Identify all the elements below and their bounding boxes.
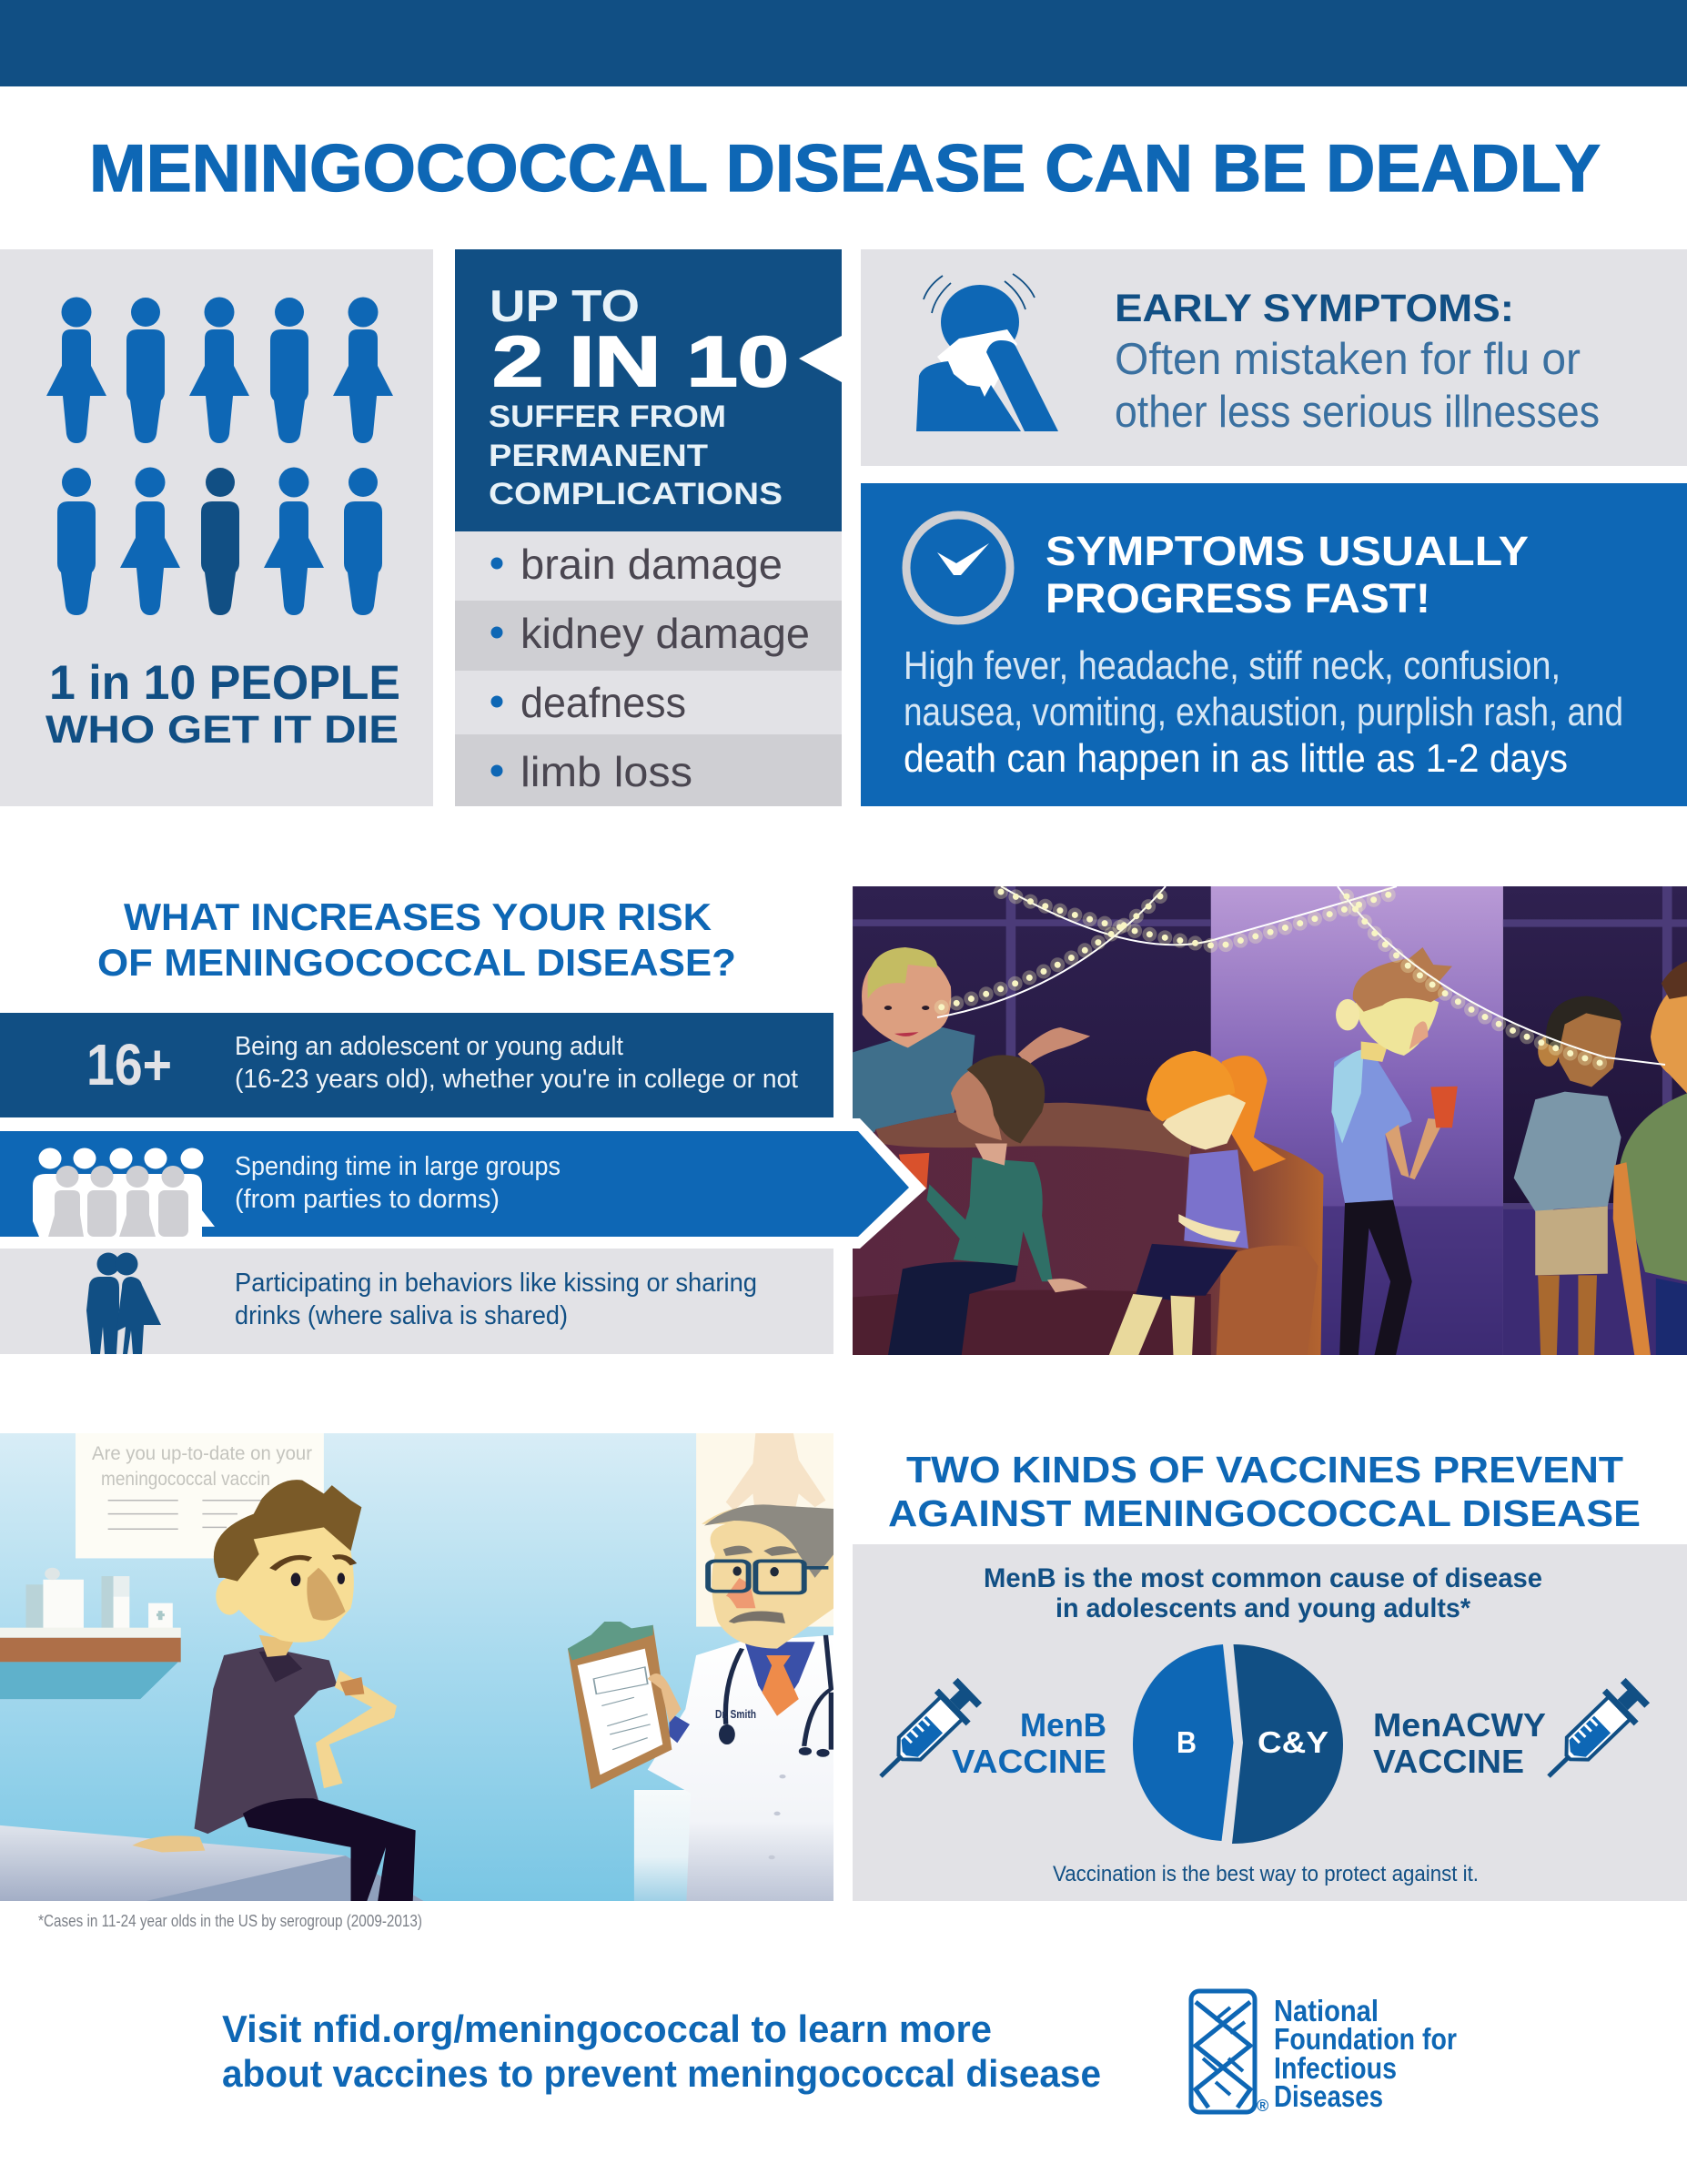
kissing text: Participating in behaviors like kissing or sharing: [235, 1269, 757, 1298]
string lights: [937, 886, 1665, 1065]
pie chart: B: [1177, 1725, 1197, 1759]
heading: vaccines: TWO KINDS OF VACCINES PREVENT: [906, 1449, 1623, 1491]
complications heading: UP TO: [490, 282, 640, 331]
icon: clock: [906, 515, 1010, 621]
panel: symptoms progress fast: [861, 483, 1687, 806]
notch arrow: [799, 336, 842, 382]
complications list: kidney damage: [520, 610, 810, 657]
call to action: about vaccines to prevent meningococcal disease: [222, 2052, 1101, 2095]
call to action: Visit nfid.org/meningococcal to learn more: [222, 2007, 992, 2050]
complications heading: PERMANENT: [489, 439, 708, 473]
symptoms heading: [1046, 528, 1529, 622]
kissing text: drinks (where saliva is shared): [235, 1301, 568, 1330]
boy with shorts: [1514, 1092, 1621, 1216]
age text: [235, 1032, 798, 1094]
symptoms heading: SYMPTOMS USUALLY: [1046, 528, 1529, 574]
groups text: [235, 1152, 561, 1214]
complications list: brain damage: [520, 541, 783, 588]
icon: row of people: [46, 297, 393, 615]
statistic text: 1 in 10 PEOPLE: [49, 656, 400, 710]
icon: syringe right: [1533, 1674, 1653, 1793]
poster text: Are you up-to-date on your: [92, 1443, 312, 1464]
poster and shelf: [76, 1433, 324, 1558]
symptoms list: death can happen in as little as 1-2 days: [904, 736, 1568, 781]
MenB statement: [984, 1563, 1542, 1623]
risk factor: kissing: [0, 1249, 833, 1354]
top banner: [0, 0, 1687, 86]
complications list: deafness: [520, 679, 686, 726]
badge name: Dr. Smith: [715, 1707, 756, 1721]
icon: person with headache: [916, 274, 1058, 431]
MenB statement: MenB is the most common cause of disease: [984, 1563, 1542, 1593]
icon: DNA helix: [1191, 1991, 1255, 2112]
risk factor: groups arrow: [0, 1131, 909, 1237]
early symptoms text: other less serious illnesses: [1115, 388, 1600, 437]
pie chart: C&Y: [1258, 1725, 1328, 1759]
organization name: Foundation for: [1274, 2022, 1457, 2056]
couch: [853, 1103, 1323, 1355]
complications list: limb loss: [520, 748, 692, 795]
heading: risk: OF MENINGOCOCCAL DISEASE?: [97, 941, 736, 984]
seated boy: [954, 1158, 1053, 1281]
MenB vaccine label: [952, 1706, 1106, 1780]
MenB vaccine label: VACCINE: [952, 1743, 1106, 1780]
age text: Being an adolescent or young adult: [235, 1032, 623, 1061]
statistic text: WHO GET IT DIE: [45, 708, 399, 752]
vaccination note: Vaccination is the best way to protect against it.: [1053, 1862, 1479, 1886]
complications heading: SUFFER FROM: [489, 399, 726, 434]
title: MENINGOCOCCAL DISEASE CAN BE DEADLY: [89, 132, 1601, 206]
poster text: meningococcal vaccin: [101, 1469, 270, 1490]
symptoms list: [904, 643, 1623, 781]
right man: [1619, 1093, 1687, 1281]
organization name: [1257, 1994, 1457, 2115]
heading: risk: [97, 895, 736, 984]
wall chart and cabinet: [696, 1433, 833, 1627]
redhead girl: [1222, 1056, 1286, 1172]
organization name: ®: [1257, 2097, 1268, 2115]
MenACWY vaccine label: [1373, 1706, 1546, 1780]
organization name: Infectious: [1274, 2051, 1397, 2085]
footnote: *Cases in 11-24 year olds in the US by serogroup (2009-2013): [38, 1912, 422, 1930]
illustration: doctor visit: [0, 1433, 833, 1901]
symptoms heading: PROGRESS FAST!: [1046, 575, 1430, 622]
complications heading: 2 IN 10: [492, 321, 789, 401]
panel: vaccines: [853, 1544, 1687, 1901]
complications heading: COMPLICATIONS: [489, 477, 783, 511]
kissing text: [235, 1269, 757, 1330]
doctor: [648, 1635, 833, 1901]
early symptoms text: Often mistaken for flu or: [1115, 335, 1581, 384]
early symptoms text: [1115, 287, 1600, 437]
statistic text: [45, 656, 400, 752]
icon: kissing couple: [86, 1252, 161, 1354]
arrow outline over photo: [853, 1118, 926, 1249]
age text: (16-23 years old), whether you're in college or not: [235, 1065, 798, 1094]
MenB vaccine label: MenB: [1020, 1706, 1106, 1744]
panel: complications: [455, 249, 842, 806]
MenACWY vaccine label: MenACWY: [1373, 1706, 1546, 1744]
heading: risk: WHAT INCREASES YOUR RISK: [124, 895, 712, 938]
logo: NFID: [1191, 1991, 1457, 2115]
organization name: National: [1274, 1994, 1379, 2027]
organization name: Diseases: [1274, 2079, 1383, 2113]
pie chart: [1133, 1644, 1343, 1844]
patient: [132, 1835, 205, 1852]
icon: syringe left: [865, 1674, 985, 1793]
groups text: (from parties to dorms): [235, 1185, 500, 1214]
icon: crowd: [33, 1148, 215, 1237]
exam bed: [0, 1825, 424, 1901]
poster text: [92, 1443, 312, 1490]
early symptoms text: EARLY SYMPTOMS:: [1115, 287, 1514, 330]
complications list: [455, 531, 842, 806]
groups text: Spending time in large groups: [235, 1152, 561, 1181]
call to action: [222, 2007, 1101, 2095]
complications heading: [489, 282, 789, 511]
illustration: party scene: [853, 886, 1687, 1355]
MenB statement: in adolescents and young adults*: [1056, 1593, 1470, 1623]
age number: 16+: [86, 1032, 172, 1097]
MenACWY vaccine label: VACCINE: [1373, 1743, 1524, 1780]
panel: 1 in 10 people: [0, 249, 433, 806]
heading: vaccines: AGAINST MENINGOCOCCAL DISEASE: [888, 1492, 1641, 1534]
blond man: [853, 1027, 975, 1134]
heading: vaccines: [888, 1449, 1641, 1534]
panel: early symptoms: [861, 249, 1687, 466]
symptoms list: High fever, headache, stiff neck, confusion,: [904, 643, 1561, 688]
tall boy: [1333, 1054, 1412, 1203]
risk factor: age: [0, 1013, 833, 1117]
